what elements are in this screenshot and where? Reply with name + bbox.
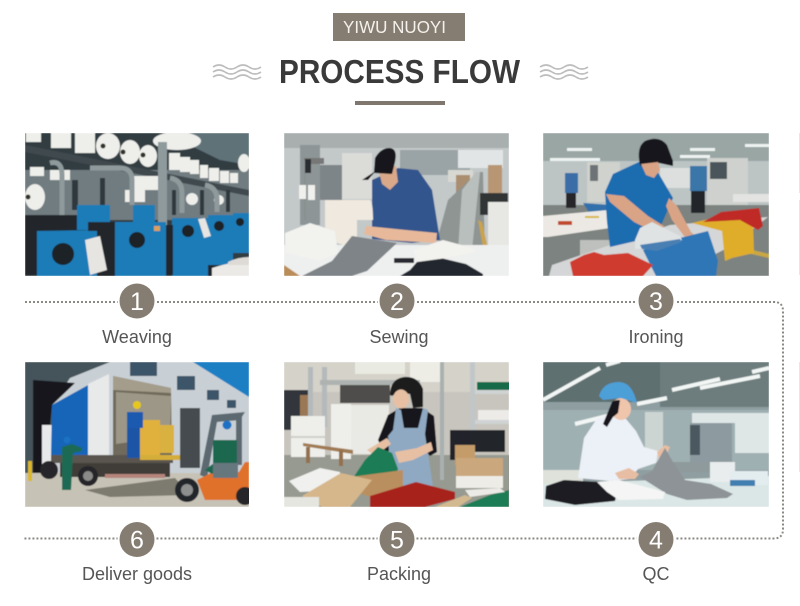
step 5: packing: 5	[390, 526, 404, 554]
photo: sewing station	[284, 133, 509, 276]
step 6: deliver goods: Deliver goods	[82, 564, 192, 584]
photo: packing station	[284, 362, 511, 507]
step 2: sewing	[369, 282, 429, 347]
brand badge	[333, 13, 465, 41]
step 1: weaving: Weaving	[102, 327, 172, 347]
step 3: ironing	[628, 282, 684, 347]
icon: right waves	[540, 65, 588, 79]
step 6: deliver goods: 6	[130, 526, 144, 554]
title underline	[355, 101, 445, 105]
flow connector	[23, 302, 783, 538]
icon: left waves	[213, 65, 261, 79]
step 4: QC: QC	[642, 564, 670, 584]
step 1: weaving	[102, 282, 172, 347]
step 1: weaving: 1	[130, 288, 144, 316]
brand badge: YIWU NUOYI	[343, 17, 446, 37]
step 2: sewing: Sewing	[369, 327, 429, 347]
photo: delivery truck and forklift	[25, 362, 254, 507]
step 3: ironing: Ironing	[628, 327, 684, 347]
step 2: sewing: 2	[390, 288, 404, 316]
step 4: QC	[636, 520, 676, 584]
photo: ironing station	[543, 133, 769, 276]
step 4: QC: 4	[649, 526, 663, 554]
photo: quality control	[543, 361, 769, 507]
step 3: ironing: 3	[649, 288, 663, 316]
step 5: packing	[367, 520, 431, 584]
title: PROCESS FLOW	[279, 54, 520, 91]
step 5: packing: Packing	[367, 564, 431, 584]
step 6: deliver goods	[82, 520, 192, 584]
photo: weaving machines	[25, 132, 250, 276]
